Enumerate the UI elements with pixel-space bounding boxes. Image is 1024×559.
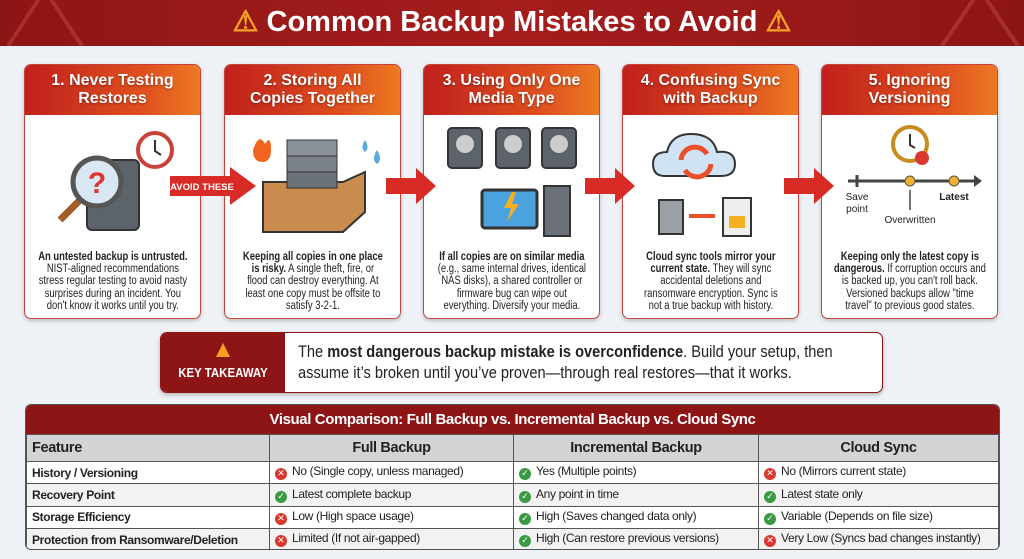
- callout: key takeaway: The most dangerous backup mistake is overconfidence. Build your setup, then: [298, 342, 833, 361]
- comparison table: ✓: [521, 469, 529, 479]
- text: [644, 251, 778, 312]
- text: (e.g., same internal drives, identical: [438, 263, 586, 275]
- icon: timeline: Latest: [939, 192, 969, 203]
- comparison table: Yes (Multiple points): [536, 464, 636, 478]
- text: Cloud sync tools mirror your: [646, 251, 776, 263]
- comparison table: [25, 404, 1000, 550]
- arrow 3: [585, 168, 635, 204]
- panel: card 2: 2. Storing All: [263, 72, 362, 89]
- text: surprises during an incident. You: [45, 288, 181, 300]
- panel: card 3: 3. Using Only One: [443, 72, 580, 89]
- comparison table: Visual Comparison: Full Backup vs. Incremental Backup vs. Cloud Sync: [269, 411, 756, 428]
- comparison table: Incremental Backup: [570, 440, 702, 456]
- text: If all copies are on similar media: [439, 251, 584, 263]
- arrow 4: [784, 168, 834, 204]
- text: accidental deletions and: [660, 275, 761, 287]
- icon: magnifier on disk: ?: [88, 167, 106, 200]
- text: firmware bug can wipe out: [457, 288, 567, 300]
- text: satisfy 3-2-1.: [286, 300, 340, 312]
- panel: card 4: [622, 64, 799, 319]
- text: [243, 251, 383, 312]
- comparison table: High (Saves changed data only): [536, 509, 696, 523]
- panel: card 1: 1. Never Testing: [51, 72, 174, 89]
- comparison table: ✓: [521, 536, 529, 546]
- icon: timeline: [846, 125, 982, 226]
- header banner: [0, 0, 1024, 46]
- callout: key takeaway: [160, 332, 883, 393]
- comparison table: No (Single copy, unless managed): [292, 464, 463, 478]
- comparison table: ✕: [766, 536, 774, 546]
- comparison table: Latest complete backup: [292, 487, 411, 501]
- text: ransomware encryption. Sync is: [644, 288, 778, 300]
- comparison table: Full Backup: [352, 440, 431, 456]
- panel: card 5: [821, 64, 998, 319]
- icon: timeline: Save: [846, 192, 869, 203]
- panel: card 3: Media Type: [469, 90, 554, 107]
- text: NAS disks), a shared controller or: [441, 275, 582, 287]
- text: Keeping only the latest copy is: [841, 251, 979, 263]
- arrow: avoid these: [170, 167, 256, 205]
- text: flood can destroy everything. At: [247, 275, 379, 287]
- comparison table: ✕: [766, 469, 774, 479]
- panel: card 5: 5. Ignoring: [869, 72, 950, 89]
- text: Versioned backups allow "time: [846, 288, 974, 300]
- panel: card 5: Versioning: [869, 90, 950, 107]
- comparison table: Storage Efficiency: [32, 510, 130, 524]
- panel: card 1: [24, 64, 201, 319]
- comparison table: ✕: [277, 536, 285, 546]
- arrow 2: [386, 168, 436, 204]
- comparison table: ✓: [766, 492, 774, 502]
- panel: card 2: Copies Together: [250, 90, 375, 107]
- text: current state. They will sync: [650, 263, 771, 275]
- comparison table: Cloud Sync: [840, 440, 917, 456]
- comparison table: Recovery Point: [32, 488, 114, 502]
- text: travel" to previous good states.: [845, 300, 974, 312]
- panel: card 2: [224, 64, 401, 319]
- text: An untested backup is untrusted.: [38, 251, 188, 263]
- panel: card 4: 4. Confusing Sync: [641, 72, 780, 89]
- icon: drawer with servers: [253, 139, 380, 233]
- arrow: avoid these: AVOID THESE: [170, 182, 234, 193]
- icon: drives and computer: [447, 127, 577, 237]
- comparison table: Protection from Ransomware/Deletion: [32, 533, 238, 547]
- text: [834, 251, 986, 312]
- panel: card 1: Restores: [78, 90, 147, 107]
- icon: cloud sync: [652, 133, 752, 237]
- text: Keeping all copies in one place: [243, 251, 383, 263]
- comparison table: Variable (Depends on file size): [781, 509, 933, 523]
- comparison table: ✓: [277, 492, 285, 502]
- comparison table: Latest state only: [781, 487, 862, 501]
- comparison table: ✓: [766, 514, 774, 524]
- text: is risky. A single theft, fire, or: [252, 263, 374, 275]
- icon: timeline: point: [846, 204, 868, 215]
- comparison table: Any point in time: [536, 487, 619, 501]
- text: NIST-aligned recommendations: [47, 263, 179, 275]
- comparison table: No (Mirrors current state): [781, 464, 906, 478]
- icon: magnifier on disk: [58, 131, 174, 231]
- comparison table: Low (High space usage): [292, 509, 414, 523]
- text: least one copy must be offsite to: [245, 288, 380, 300]
- callout: key takeaway: KEY TAKEAWAY: [178, 365, 268, 380]
- comparison table: ✕: [277, 469, 285, 479]
- text: everything. Diversify your media.: [443, 300, 580, 312]
- comparison table: Very Low (Syncs bad changes instantly): [781, 531, 980, 545]
- text: [38, 251, 188, 312]
- comparison table: History / Versioning: [32, 466, 138, 480]
- text: is backed up, you can't roll back.: [842, 275, 978, 287]
- text: stress regular testing to avoid nasty: [39, 275, 187, 287]
- comparison table: High (Can restore previous versions): [536, 531, 719, 545]
- panel: card 3: [423, 64, 600, 319]
- callout: key takeaway: ▲: [211, 336, 235, 363]
- text: not a true backup with history.: [649, 300, 773, 312]
- comparison table: ✕: [277, 514, 285, 524]
- comparison table: ✓: [521, 492, 529, 502]
- callout: key takeaway: assume it’s broken until you’ve proven—through real restores—that it works.: [298, 363, 792, 382]
- text: don't know it works until you try.: [47, 300, 179, 312]
- text: dangerous. If corruption occurs and: [834, 263, 986, 275]
- comparison table: ✓: [521, 514, 529, 524]
- text: [438, 251, 586, 312]
- title: ⚠ Common Backup Mistakes to Avoid ⚠: [232, 6, 792, 38]
- comparison table: Feature: [32, 440, 82, 456]
- panel: card 4: with Backup: [663, 90, 758, 107]
- comparison table: Limited (If not air-gapped): [292, 531, 420, 545]
- icon: timeline: Overwritten: [884, 215, 936, 226]
